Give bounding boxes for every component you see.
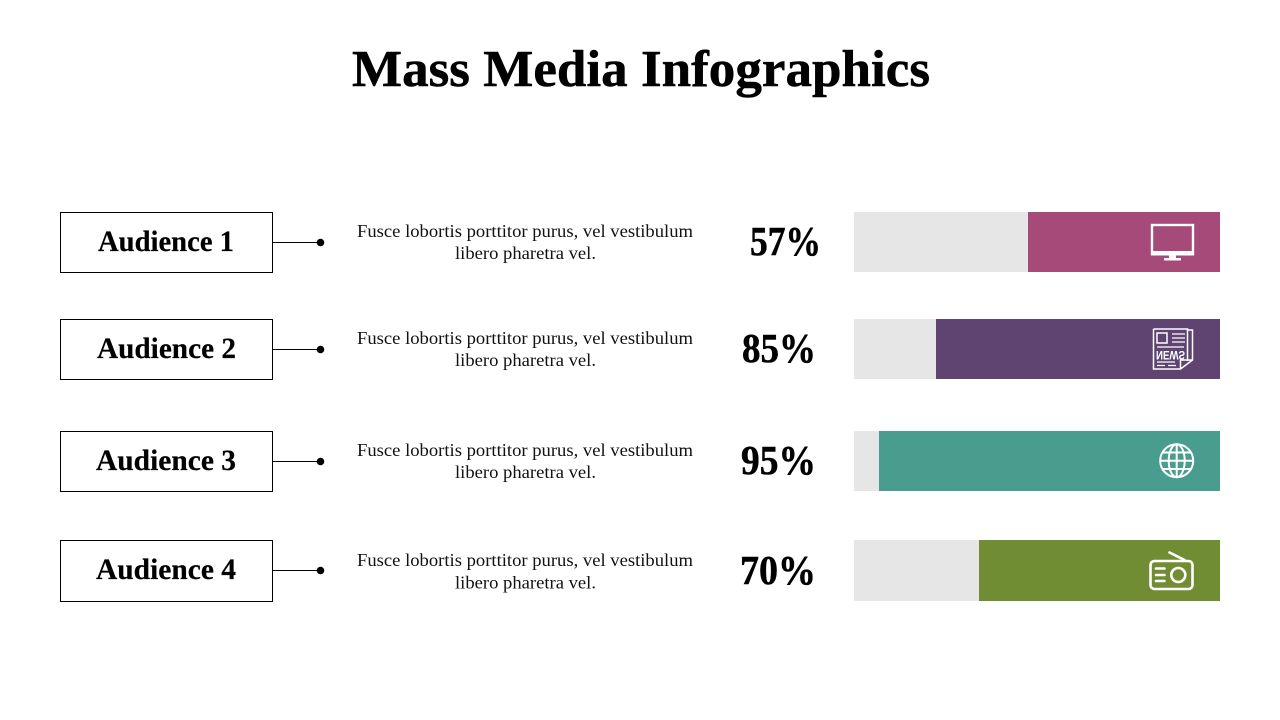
title: Mass Media Infographics — [352, 41, 930, 98]
description: audience 2: Fusce lobortis porttitor purus, vel vestibulum — [357, 328, 693, 348]
label box: Audience 3: Audience 3 — [96, 444, 236, 477]
description: audience 3: libero pharetra vel. — [455, 462, 596, 482]
bar: 95% — [854, 431, 1220, 491]
description: audience 4: libero pharetra vel. — [455, 572, 596, 592]
connector: audience 4 — [273, 567, 324, 574]
description: audience 2 — [357, 328, 693, 370]
label box: Audience 2 — [60, 320, 272, 380]
panel: audience 3 row — [60, 431, 1220, 492]
percentage: 57%: 57% — [750, 218, 821, 264]
bar: 85% — [854, 319, 1220, 379]
label box: Audience 2: Audience 2 — [97, 332, 236, 365]
description: audience 1: Fusce lobortis porttitor purus, vel vestibulum — [357, 221, 693, 241]
description: audience 1: libero pharetra vel. — [455, 243, 596, 263]
panel: audience 1 row — [60, 212, 1220, 272]
description: audience 1 — [357, 221, 693, 263]
label box: Audience 1 — [60, 212, 272, 272]
percentage: 95%: 95% — [741, 437, 816, 483]
label box: Audience 3 — [60, 432, 272, 492]
connector: audience 3 — [273, 458, 324, 465]
percentage: 70%: 70% — [740, 547, 816, 593]
label box: Audience 4 — [60, 540, 272, 602]
description: audience 3: Fusce lobortis porttitor purus, vel vestibulum — [357, 440, 693, 460]
bar: 70% — [854, 540, 1220, 601]
connector: audience 1 — [273, 239, 324, 246]
icon: globe — [1160, 444, 1193, 477]
panel: audience 4 row — [60, 540, 1220, 602]
icon: radio — [1150, 552, 1192, 589]
label box: Audience 4: Audience 4 — [96, 553, 236, 586]
percentage: 85%: 85% — [742, 325, 816, 371]
icon: monitor — [1151, 225, 1194, 260]
description: audience 4: Fusce lobortis porttitor purus, vel vestibulum — [357, 550, 693, 570]
description: audience 2: libero pharetra vel. — [455, 350, 596, 370]
description: audience 4 — [357, 550, 693, 592]
icon: newspaper: NEWS — [1156, 348, 1185, 360]
icon: newspaper — [1154, 329, 1192, 369]
panel: audience 2 row — [60, 319, 1220, 380]
bar: 57% — [854, 212, 1220, 272]
label box: Audience 1: Audience 1 — [98, 225, 234, 258]
connector: audience 2 — [273, 346, 324, 353]
description: audience 3 — [357, 440, 693, 482]
